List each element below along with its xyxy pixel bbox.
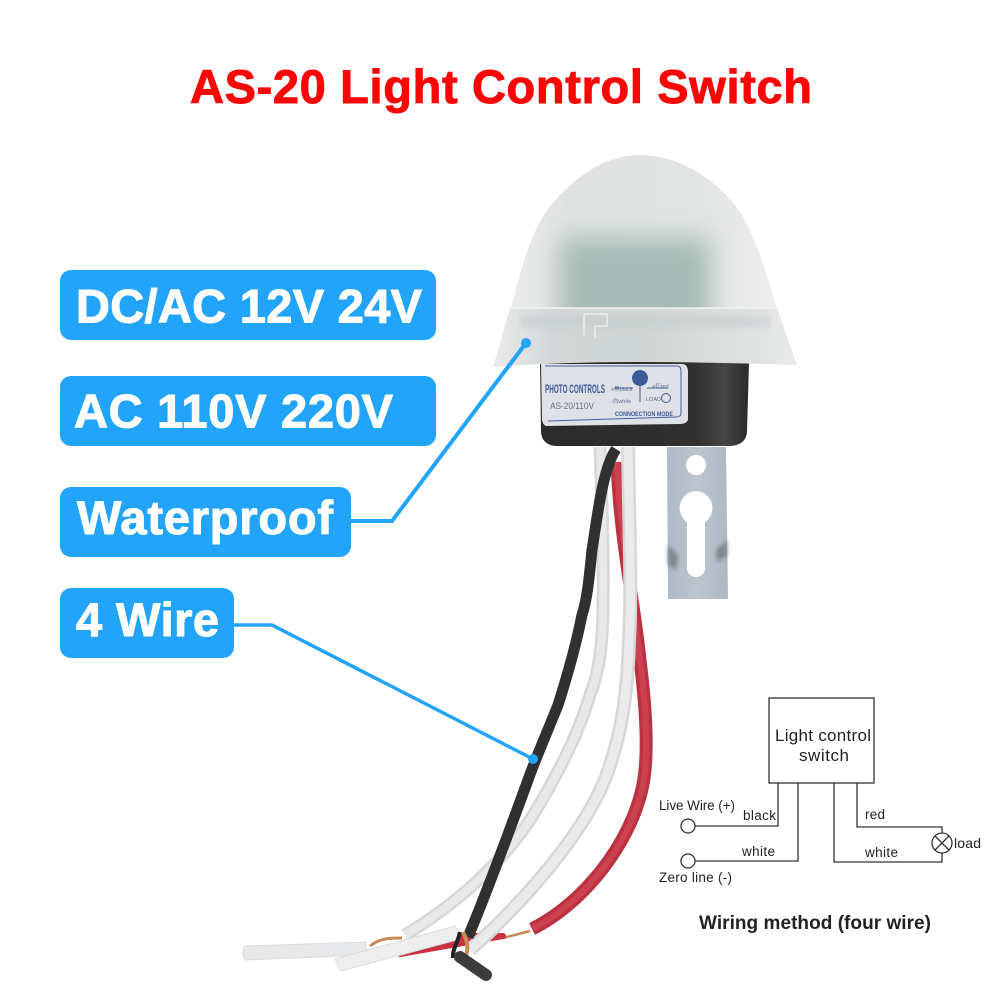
- diagram: switch box: [769, 698, 874, 783]
- diagram: wires: [695, 783, 942, 862]
- product label: LOAD: [646, 397, 661, 403]
- wiring diagram: [659, 698, 981, 934]
- badge: DC/AC 12V 24V: [60, 270, 436, 340]
- product label: -白white: [611, 397, 631, 405]
- leader line: 4 wire: [228, 625, 538, 764]
- diagram: wire labels: Live Wire (+): [659, 798, 735, 813]
- product label: CONNOECTION MODE: [615, 411, 674, 418]
- badge: Waterproof: Waterproof: [77, 491, 333, 544]
- wire tip: black: [460, 957, 486, 975]
- badge: 4 Wire: [60, 588, 234, 658]
- badge: AC 110V 220V: [60, 376, 436, 446]
- badge: Waterproof: [60, 487, 351, 557]
- wire: white 2: [405, 447, 603, 935]
- product photo: photocell switch: [243, 155, 797, 975]
- product label: +红red: [652, 382, 669, 390]
- diagram: terminals: [681, 819, 695, 868]
- wire: black: [453, 449, 616, 958]
- badge: AC 110V 220V: AC 110V 220V: [74, 384, 394, 438]
- diagram: load lamp: load: [954, 835, 981, 851]
- diagram: wire labels: [659, 798, 898, 885]
- translucent dome cap: [493, 155, 797, 367]
- wire tip: white left: [243, 942, 366, 960]
- diagram: load lamp: [932, 833, 981, 853]
- diagram: switch box: Light control: [775, 726, 871, 745]
- diagram: wire labels: Zero line (-): [659, 870, 732, 885]
- wire: white 1: [470, 447, 630, 950]
- wire tip: white front: [335, 926, 458, 971]
- black base: [540, 362, 749, 446]
- title: AS-20 Light Control Switch: [190, 60, 812, 113]
- wire: red: [370, 462, 646, 954]
- badge: DC/AC 12V 24V: DC/AC 12V 24V: [76, 280, 423, 332]
- badge: 4 Wire: 4 Wire: [76, 593, 219, 646]
- mounting bracket: [667, 447, 728, 599]
- diagram: switch box: switch: [799, 746, 849, 765]
- diagram: wire labels: red: [865, 807, 885, 822]
- diagram: wire labels: white: [864, 845, 898, 860]
- leader line: waterproof: [345, 338, 531, 521]
- product label: PHOTO CONTROLS: [545, 382, 605, 396]
- product label: +黑black: [611, 386, 633, 393]
- diagram: wire labels: white: [741, 844, 775, 859]
- diagram: caption: Wiring method (four wire): [699, 913, 931, 934]
- product label: [541, 364, 688, 426]
- product label: AS-20/110V: [550, 401, 595, 412]
- diagram: wire labels: black: [743, 808, 776, 823]
